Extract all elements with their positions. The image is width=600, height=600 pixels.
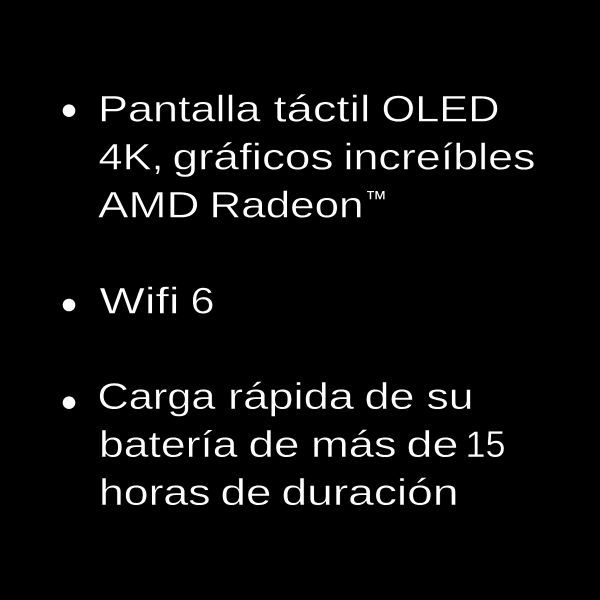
text: 4K, gráficos increíbles <box>98 136 536 178</box>
text: Wifi 6: Wifi <box>100 280 180 322</box>
text: batería de más de 15: 15 <box>466 423 506 465</box>
text: Wifi 6 <box>100 280 214 322</box>
bullet item: screen and graphics <box>63 88 535 226</box>
text: Carga rápida de su <box>98 375 474 417</box>
text: Carga rápida de su: de <box>364 375 414 417</box>
text: AMD Radeon: Radeon <box>210 184 364 226</box>
text: horas de duración: horas <box>99 471 210 513</box>
text: batería de más de 15: más <box>311 423 396 465</box>
text: batería de más de 15: de <box>248 423 300 465</box>
text: Pantalla táctil OLED: OLED <box>382 88 500 130</box>
bullet dot <box>63 396 75 409</box>
text: Pantalla táctil OLED <box>98 88 500 130</box>
text: Wifi 6: 6 <box>190 280 214 322</box>
bullet dot <box>63 104 75 117</box>
text: Carga rápida de su: rápida <box>228 375 354 417</box>
text: AMD Radeon <box>98 184 387 226</box>
text: batería de más de 15: de <box>406 423 458 465</box>
text: batería de más de 15 <box>99 423 506 465</box>
text: horas de duración: duración <box>282 471 458 513</box>
text: AMD Radeon: ™ <box>365 186 387 211</box>
bullet dot <box>63 299 75 311</box>
text: horas de duración: de <box>220 471 272 513</box>
text: Pantalla táctil OLED: táctil <box>274 88 370 130</box>
text: 4K, gráficos increíbles: gráficos <box>172 136 334 178</box>
text: horas de duración <box>99 471 458 513</box>
text: Pantalla táctil OLED: Pantalla <box>98 88 261 130</box>
text: Carga rápida de su: su <box>426 375 474 417</box>
bullet item: battery <box>63 375 505 513</box>
text: batería de más de 15: batería <box>99 423 238 465</box>
text: 4K, gráficos increíbles: increíbles <box>344 136 536 178</box>
text: AMD Radeon: AMD <box>98 184 200 226</box>
bullet item: wifi <box>63 280 215 322</box>
text: Carga rápida de su: Carga <box>98 375 216 417</box>
text: 4K, gráficos increíbles: 4K, <box>98 136 164 178</box>
